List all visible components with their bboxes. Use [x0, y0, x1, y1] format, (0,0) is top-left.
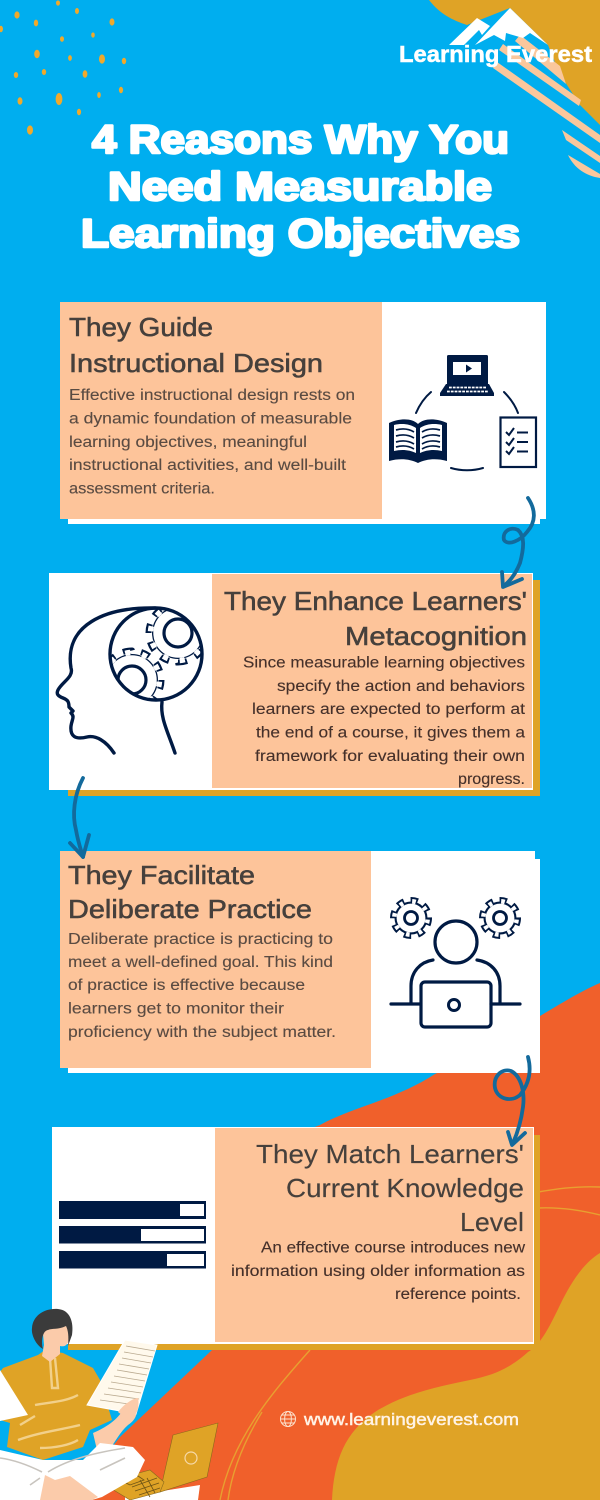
heading: Deliberate Practice: [68, 894, 312, 924]
body text: [231, 1240, 526, 1303]
icon: mountains: [449, 8, 548, 45]
paper in left hand: [0, 1370, 28, 1421]
thin gold curved lines: [220, 1187, 600, 1500]
laptop: [102, 1423, 218, 1500]
person: neck and face: [42, 1318, 70, 1362]
heading: Current Knowledge: [286, 1173, 524, 1203]
icon: checklist: [500, 418, 536, 467]
gold background blob: [332, 1253, 600, 1500]
person: foot: [40, 1475, 98, 1500]
body text: information using older information as: [231, 1263, 525, 1280]
heading: They Guide: [69, 312, 213, 342]
website link: [280, 1411, 519, 1429]
panel: facilitate deliberate practice: [60, 851, 540, 1073]
title: Learning Objectives: [81, 212, 520, 256]
heading: They Enhance Learners': [224, 586, 527, 616]
icon: learning cycle: [389, 355, 536, 470]
body text: framework for evaluating their own: [255, 748, 525, 765]
heading: [68, 860, 312, 924]
body text: Effective instructional design rests on: [69, 387, 355, 404]
arrow: card 3 to card 4: [495, 1057, 530, 1145]
person: hair: [32, 1309, 72, 1349]
person: hand: [118, 1398, 139, 1420]
body text: assessment criteria.: [69, 480, 215, 498]
body text: specify the action and behaviors: [277, 678, 525, 695]
body text: Deliberate practice is practicing to: [68, 931, 333, 948]
heading: Metacognition: [345, 621, 527, 651]
panel: match current knowledge: [52, 1127, 540, 1350]
logo: [399, 8, 592, 67]
heading: [224, 586, 527, 651]
peach diagonal stripes: [493, 35, 600, 178]
body text: meet a well-defined goal. This kind: [68, 954, 333, 971]
body text: learners get to monitor their: [68, 1000, 284, 1018]
person: trousers: [0, 1443, 145, 1500]
icon: left gear: [392, 900, 430, 936]
body text: instructional activities, and well-built: [69, 457, 347, 474]
paper in right hand: [87, 1340, 157, 1414]
arrow: card 1 to card 2: [502, 498, 534, 587]
body text: [68, 931, 336, 1041]
icon: open book: [389, 419, 447, 463]
orange background blob: [70, 983, 600, 1500]
body text: a dynamic foundation of measurable: [69, 410, 352, 428]
icon: person at laptop with gears: [391, 900, 520, 1027]
icon: progress bars: [59, 1201, 206, 1268]
top right gold shape: [429, 0, 600, 125]
body text: reference points.: [395, 1286, 521, 1303]
heading: Level: [460, 1207, 524, 1237]
body text: progress.: [458, 771, 525, 788]
body text: the end of a course, it gives them a: [256, 724, 525, 742]
body text: proficiency with the subject matter.: [68, 1024, 336, 1041]
heading: They Match Learners': [256, 1139, 524, 1169]
arrow: card 2 to card 3: [70, 778, 89, 857]
title: [81, 118, 520, 256]
body text: An effective course introduces new: [261, 1240, 526, 1256]
person: forearm: [93, 1404, 137, 1452]
heading: They Facilitate: [68, 860, 255, 890]
person: shirt: [0, 1350, 112, 1460]
website url: www.learningeverest.com: [303, 1411, 519, 1429]
title: 4 Reasons Why You: [92, 118, 509, 162]
body text: Since measurable learning objectives: [243, 654, 525, 672]
body text: learners are expected to perform at: [252, 701, 526, 718]
heading: [69, 312, 323, 378]
heading: Instructional Design: [69, 348, 323, 378]
illustration: person reading with laptop: [0, 1309, 218, 1500]
icon: head with gears: [57, 604, 207, 753]
logo wordmark: Learning Everest: [399, 41, 592, 67]
title: Need Measurable: [108, 165, 492, 209]
icon: laptop: [440, 355, 494, 396]
icon: globe: [280, 1412, 296, 1426]
heading: [256, 1139, 524, 1237]
icon: right gear: [482, 900, 518, 936]
decorative gold dots: [0, 0, 126, 135]
cycle arcs: [416, 392, 518, 470]
panel: guide instructional design: [60, 302, 546, 524]
body text: [69, 387, 355, 498]
trouser folds: [0, 1448, 125, 1485]
body text: learning objectives, meaningful: [69, 434, 307, 451]
body text: of practice is effective because: [68, 977, 305, 994]
body text: [243, 654, 526, 788]
shirt highlights: [18, 1358, 80, 1448]
panel: enhance metacognition: [49, 573, 540, 796]
